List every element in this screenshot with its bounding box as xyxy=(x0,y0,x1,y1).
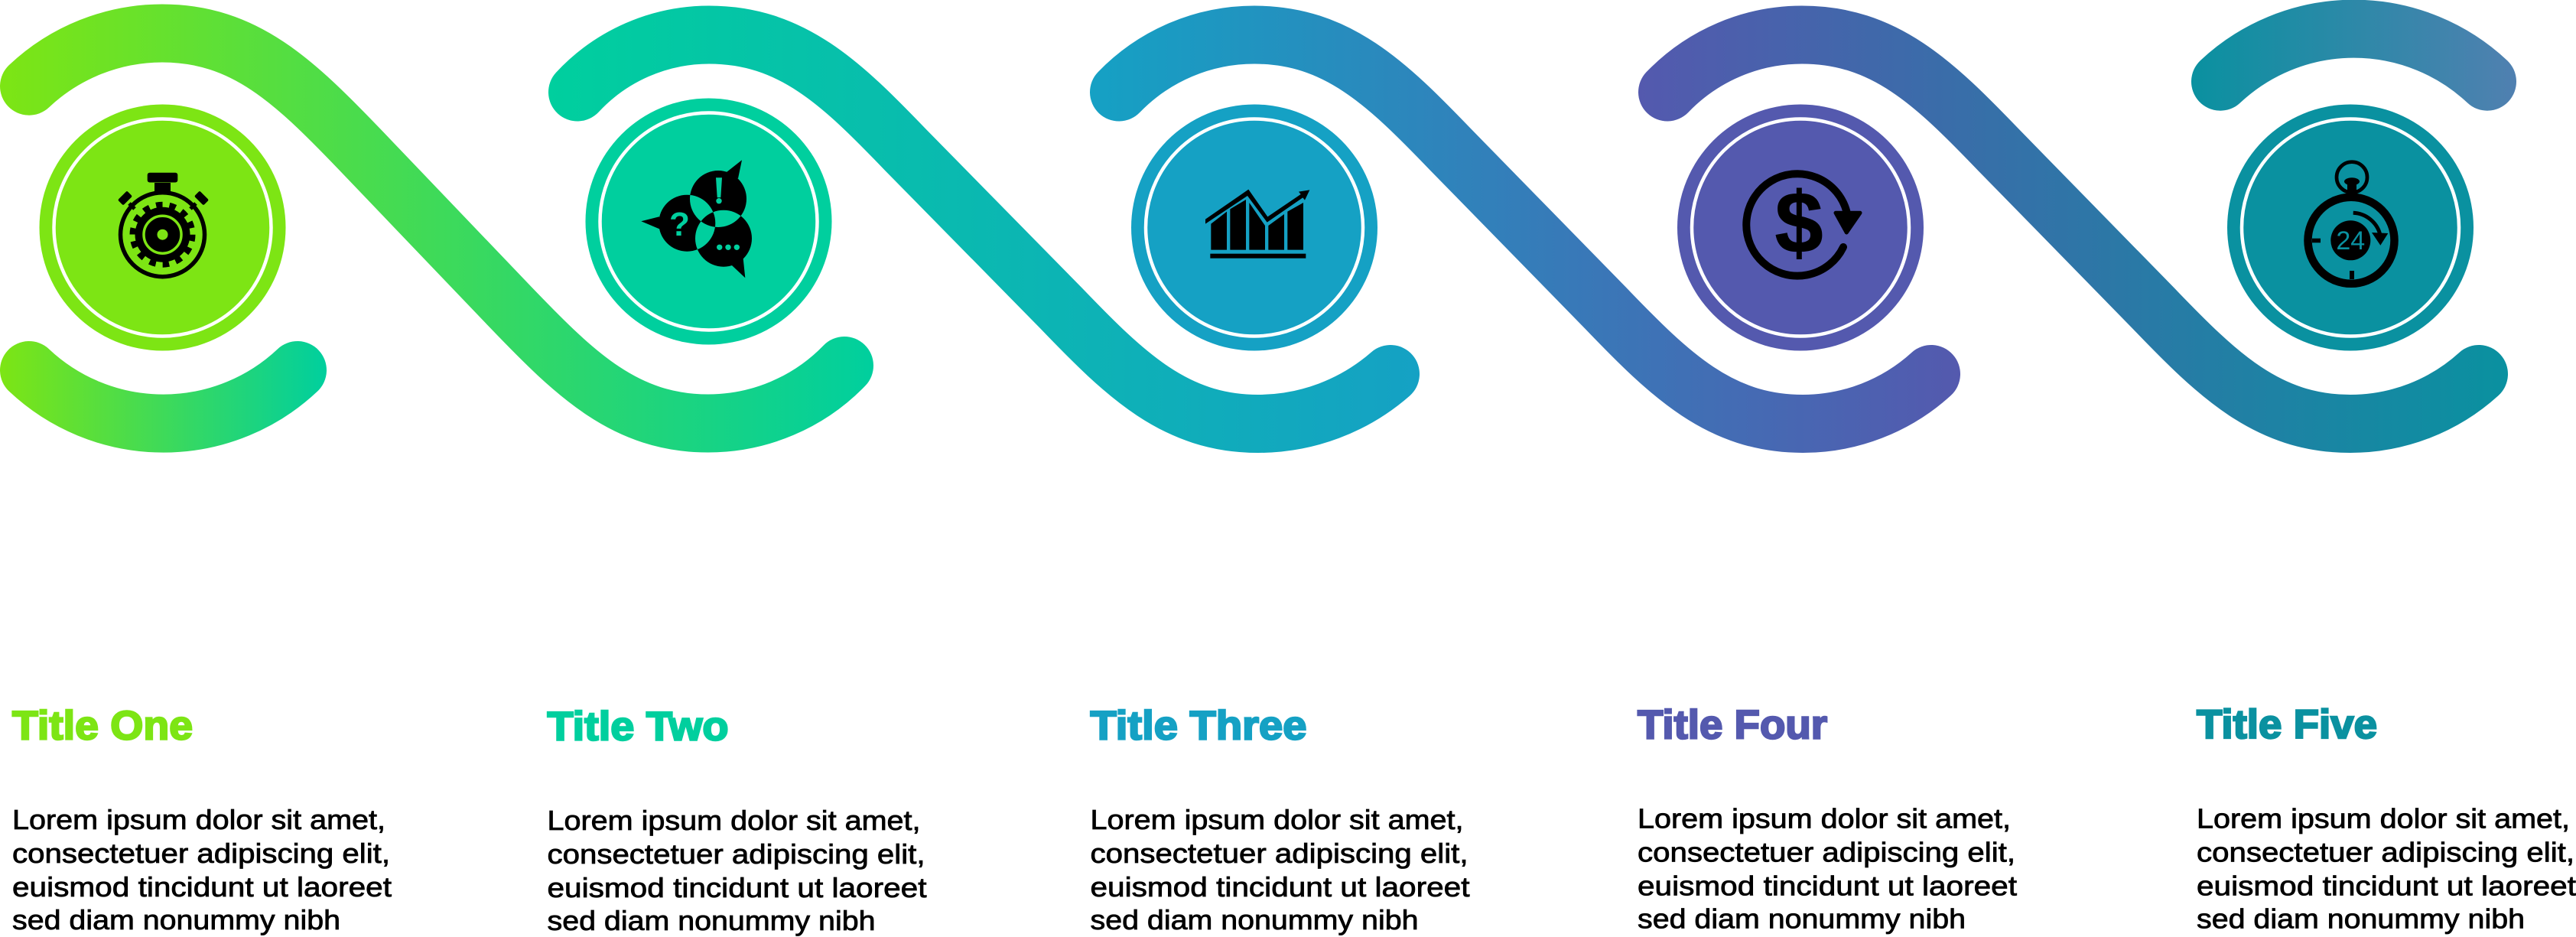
body: step 3: Lorem ipsum dolor sit amet, xyxy=(1091,804,1464,835)
badge: step 2 xyxy=(586,98,832,344)
icon: rising bar chart xyxy=(1205,190,1309,259)
ribbon: wave step 4 to 5 xyxy=(1667,35,2479,424)
text block: step 5 xyxy=(2197,702,2576,935)
text block: step 2 xyxy=(548,704,927,936)
text block: step 3 xyxy=(1091,704,1470,935)
heading: Title Two: Title Two xyxy=(548,704,728,750)
body: step 4: euismod tincidunt ut laoreet xyxy=(1638,870,2017,901)
ribbon: top arc step 5 xyxy=(2220,29,2487,82)
body: step 3: consectetuer adipiscing elit, xyxy=(1091,838,1469,869)
body: step 2: consectetuer adipiscing elit, xyxy=(548,838,925,870)
body: step 5: Lorem ipsum dolor sit amet, xyxy=(2197,803,2570,835)
icon: dollar with circular arrow: $ xyxy=(1775,174,1823,271)
body: step 1 xyxy=(12,804,392,935)
body: step 1: euismod tincidunt ut laoreet xyxy=(12,871,392,903)
body: step 3: sed diam nonummy nibh xyxy=(1091,904,1418,935)
body: step 3: euismod tincidunt ut laoreet xyxy=(1091,871,1470,903)
badge: step 1 xyxy=(40,104,286,350)
icon: dollar with circular arrow xyxy=(1746,174,1860,276)
body: step 4: sed diam nonummy nibh xyxy=(1638,903,1966,935)
body: step 5: consectetuer adipiscing elit, xyxy=(2197,837,2574,867)
body: step 2: euismod tincidunt ut laoreet xyxy=(548,872,927,903)
heading: Title Five: Title Five xyxy=(2197,702,2377,747)
body: step 5 xyxy=(2197,803,2576,935)
body: step 4 xyxy=(1638,803,2017,935)
badge: step 5 xyxy=(2227,104,2474,350)
heading: Title Four: Title Four xyxy=(1638,702,1827,747)
badge: step 3 xyxy=(1131,104,1377,350)
icon: stopwatch with gear xyxy=(118,173,209,277)
body: step 5: sed diam nonummy nibh xyxy=(2197,903,2525,935)
heading: Title Three: Title Three xyxy=(1091,704,1306,749)
body: step 2: Lorem ipsum dolor sit amet, xyxy=(548,805,921,836)
body: step 1: consectetuer adipiscing elit, xyxy=(12,838,390,869)
ribbon: wave step 3 to 4 xyxy=(1119,34,1931,424)
ribbon: wave step 1 to 2 xyxy=(29,34,844,424)
body: step 5: euismod tincidunt ut laoreet xyxy=(2197,870,2576,901)
body: step 1: sed diam nonummy nibh xyxy=(12,904,340,935)
body: step 2 xyxy=(548,805,927,936)
icon: 24 hour stopwatch xyxy=(2308,162,2394,284)
text block: step 4 xyxy=(1638,702,2017,935)
badge: step 4 xyxy=(1677,104,1924,350)
ribbon: wave step 2 to 3 xyxy=(577,35,1390,424)
body: step 3 xyxy=(1091,804,1470,935)
icon: three speech bubbles: ? xyxy=(669,206,690,243)
body: step 4: consectetuer adipiscing elit, xyxy=(1638,837,2015,867)
icon: 24 hour stopwatch: 24 xyxy=(2336,226,2365,255)
ribbon: bottom arc step 1 xyxy=(29,370,298,424)
body: step 2: sed diam nonummy nibh xyxy=(548,905,875,936)
text block: step 1 xyxy=(12,704,392,935)
icon: three speech bubbles xyxy=(641,160,752,278)
body: step 1: Lorem ipsum dolor sit amet, xyxy=(12,804,385,835)
body: step 4: Lorem ipsum dolor sit amet, xyxy=(1638,803,2011,835)
heading: Title One: Title One xyxy=(12,704,193,749)
